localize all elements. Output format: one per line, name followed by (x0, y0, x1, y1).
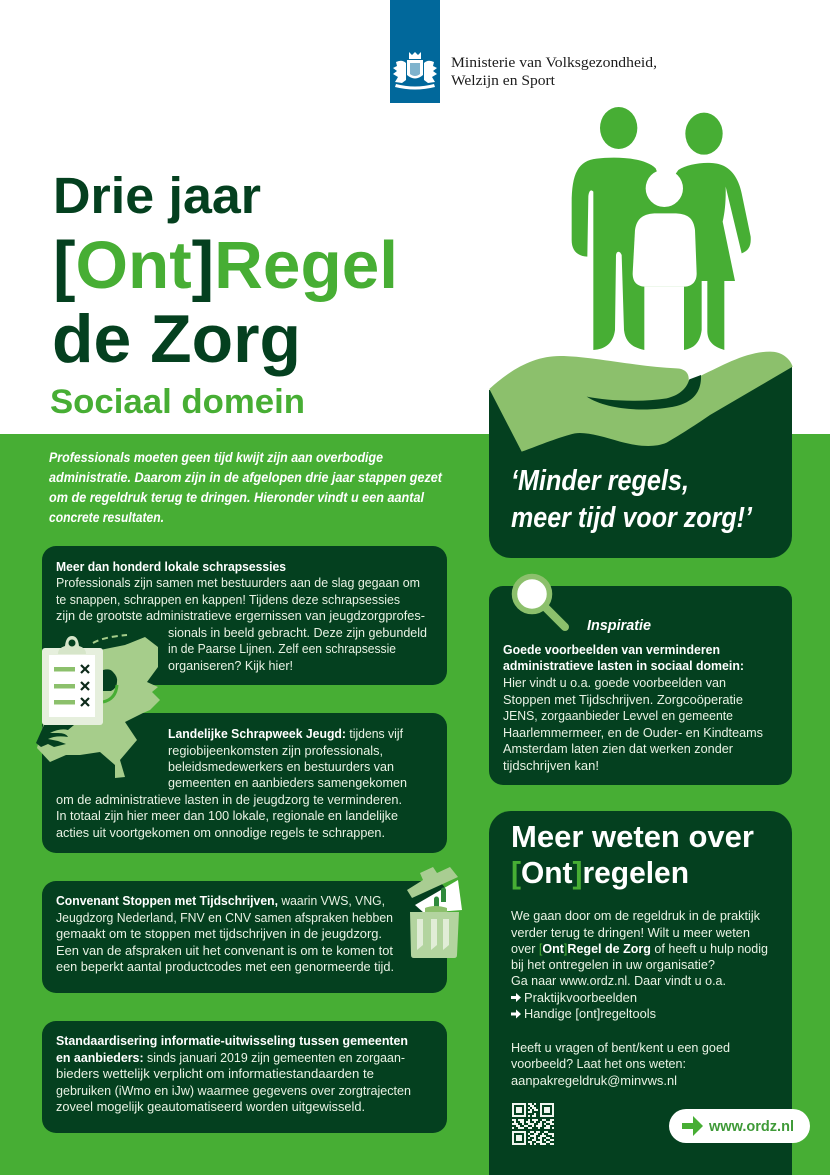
meer weten text: We gaan door om de regeldruk in de praktijk (511, 908, 760, 923)
meer weten heading (511, 819, 754, 890)
subtitle: Sociaal domein (50, 383, 305, 421)
intro text: concrete resultaten. (49, 510, 164, 525)
icon: QR code (512, 1103, 554, 1145)
schrapweek text (56, 727, 407, 840)
meer weten text: aanpakregeldruk@minvws.nl (511, 1073, 677, 1088)
icon: family (572, 107, 751, 350)
schrapsessies text: zijn de grootste administratieve ergernissen van jeugdzorgprofes- (56, 609, 425, 623)
panel: convenant (42, 881, 447, 993)
standaardisering text: gebruiken (iWmo en iJw) waarmee gegevens over zorgtrajecten (56, 1084, 411, 1098)
convenant text (56, 894, 394, 974)
schrapsessies text: Meer dan honderd lokale schrapsessies (56, 560, 286, 574)
quote (511, 465, 753, 534)
ministry name: Welzijn en Sport (451, 73, 555, 89)
schrapweek text: gemeenten en aanbieders samengekomen (168, 776, 407, 790)
panel: schrapweek (42, 713, 447, 853)
standaardisering text: bieders wettelijk verplicht om informatiestandaarden te (56, 1067, 374, 1081)
title (52, 167, 398, 377)
inspiratie text: Amsterdam laten zien dat werken zonder (503, 742, 733, 756)
inspiratie heading: Inspiratie (587, 617, 651, 634)
schrapweek text: om de administratieve lasten in de jeugdzorg te verminderen. (56, 793, 402, 807)
meer weten text: verder terug te dringen! Wilt u meer weten (511, 925, 750, 940)
inspiratie text (503, 643, 763, 773)
quote: meer tijd voor zorg!’ (511, 502, 753, 534)
meer weten text: Ga naar www.ordz.nl. Daar vindt u o.a. (511, 973, 726, 988)
checklist clipboard (42, 636, 103, 725)
logo blue ribbon with emblem (390, 0, 440, 103)
meer weten text: Handige [ont]regeltools (524, 1006, 656, 1021)
schrapweek text: acties uit voortgekomen om onnodige regels te schrappen. (56, 826, 385, 840)
icon: trash bin (407, 867, 462, 958)
inspiratie text: Haarlemmermeer, en de Ouder- en Kindteams (503, 726, 763, 740)
convenant text: Convenant Stoppen met Tijdschrijven, waarin VWS, VNG, (56, 894, 385, 908)
website url: www.ordz.nl (708, 1119, 794, 1135)
meer weten text (511, 908, 768, 1088)
ministry name: Ministerie van Volksgezondheid, (451, 55, 657, 71)
convenant text: Een van de afspraken uit het convenant is om te komen tot (56, 944, 394, 958)
schrapsessies text: in de Paarse Lijnen. Zelf een schrapsessie (168, 642, 396, 656)
panel: standaardisering (42, 1021, 447, 1133)
schrapweek text: In totaal zijn hier meer dan 100 lokale, regionale en landelijke (56, 809, 398, 823)
intro text (49, 450, 443, 525)
schrapweek text: beleidsmedewerkers en bestuurders van (168, 760, 394, 774)
icon: magnifying glass (514, 576, 565, 627)
schrapsessies text: sionals in beeld gebracht. Deze zijn gebundeld (168, 626, 427, 640)
schrapsessies text: organiseren? Kijk hier! (168, 659, 293, 673)
panel: inspiratie (489, 576, 792, 785)
standaardisering text (56, 1034, 411, 1114)
green background band (0, 434, 830, 1175)
meer weten heading: Meer weten over (511, 819, 754, 854)
meer weten text: over [Ont]Regel de Zorg of heeft u hulp nodig (511, 941, 768, 956)
inspiratie text: Goede voorbeelden van verminderen (503, 643, 720, 657)
intro text: Professionals moeten geen tijd kwijt zijn aan overbodige (49, 450, 384, 465)
meer weten text: bij het ontregelen in uw organisatie? (511, 957, 715, 972)
meer weten heading: [Ont]regelen (511, 855, 689, 890)
inspiratie text: Hier vindt u o.a. goede voorbeelden van (503, 676, 726, 690)
icon: hand (489, 352, 793, 452)
meer weten text: Praktijkvoorbeelden (524, 990, 637, 1005)
schrapsessies text: te snappen, schrappen en kappen! Tijdens deze schrapsessies (56, 593, 400, 607)
standaardisering text: Standaardisering informatie-uitwisseling tussen gemeenten (56, 1034, 408, 1048)
inspiratie text: administratieve lasten in sociaal domein: (503, 659, 744, 673)
meer weten text: voorbeeld? Laat het ons weten: (511, 1056, 686, 1071)
website button (669, 1109, 810, 1143)
standaardisering text: en aanbieders: sinds januari 2019 zijn gemeenten en zorgaan- (56, 1051, 405, 1065)
schrapsessies text: Professionals zijn samen met bestuurders aan de slag gegaan om (56, 576, 420, 590)
quote: ‘Minder regels, (511, 465, 689, 497)
panel: quote with hand (489, 352, 793, 558)
convenant text: Jeugdzorg Nederland, FNV en CNV samen afspraken hebben (56, 911, 393, 925)
meer weten text: Heeft u vragen of bent/kent u een goed (511, 1040, 730, 1055)
schrapweek text: Landelijke Schrapweek Jeugd: tijdens vijf (168, 727, 403, 741)
title: de Zorg (52, 301, 301, 377)
map (36, 635, 160, 778)
inspiratie text: tijdschrijven kan! (503, 759, 599, 773)
schrapsessies text (56, 560, 427, 673)
ministry logo (390, 0, 657, 103)
schrapweek text: regiobijeenkomsten zijn professionals, (168, 744, 383, 758)
title: Drie jaar (53, 167, 261, 224)
intro text: administratie. Daarom zijn in de afgelopen drie jaar stappen gezet (49, 470, 443, 485)
inspiratie text: JENS, zorgaanbieder Levvel en gemeente (503, 709, 733, 723)
convenant text: een beperkt aantal productcodes met een genormeerde tijd. (56, 960, 394, 974)
icon: map of the Netherlands with checklist (36, 635, 160, 778)
convenant text: gemaakt om te stoppen met tijdschrijven in de jeugdzorg. (56, 927, 382, 941)
standaardisering text: zoveel mogelijk geautomatiseerd worden uitgewisseld. (56, 1100, 365, 1114)
icon: arrow (682, 1116, 703, 1136)
panel: meer weten (489, 811, 792, 1175)
ministry name (451, 55, 657, 89)
panel: schrapsessies (42, 546, 447, 685)
intro text: om de regeldruk terug te dringen. Hieronder vindt u een aantal (49, 490, 424, 505)
inspiratie text: Stoppen met Tijdschrijven. Zorgcoöperatie (503, 693, 743, 707)
title: [Ont]Regel (53, 228, 398, 303)
